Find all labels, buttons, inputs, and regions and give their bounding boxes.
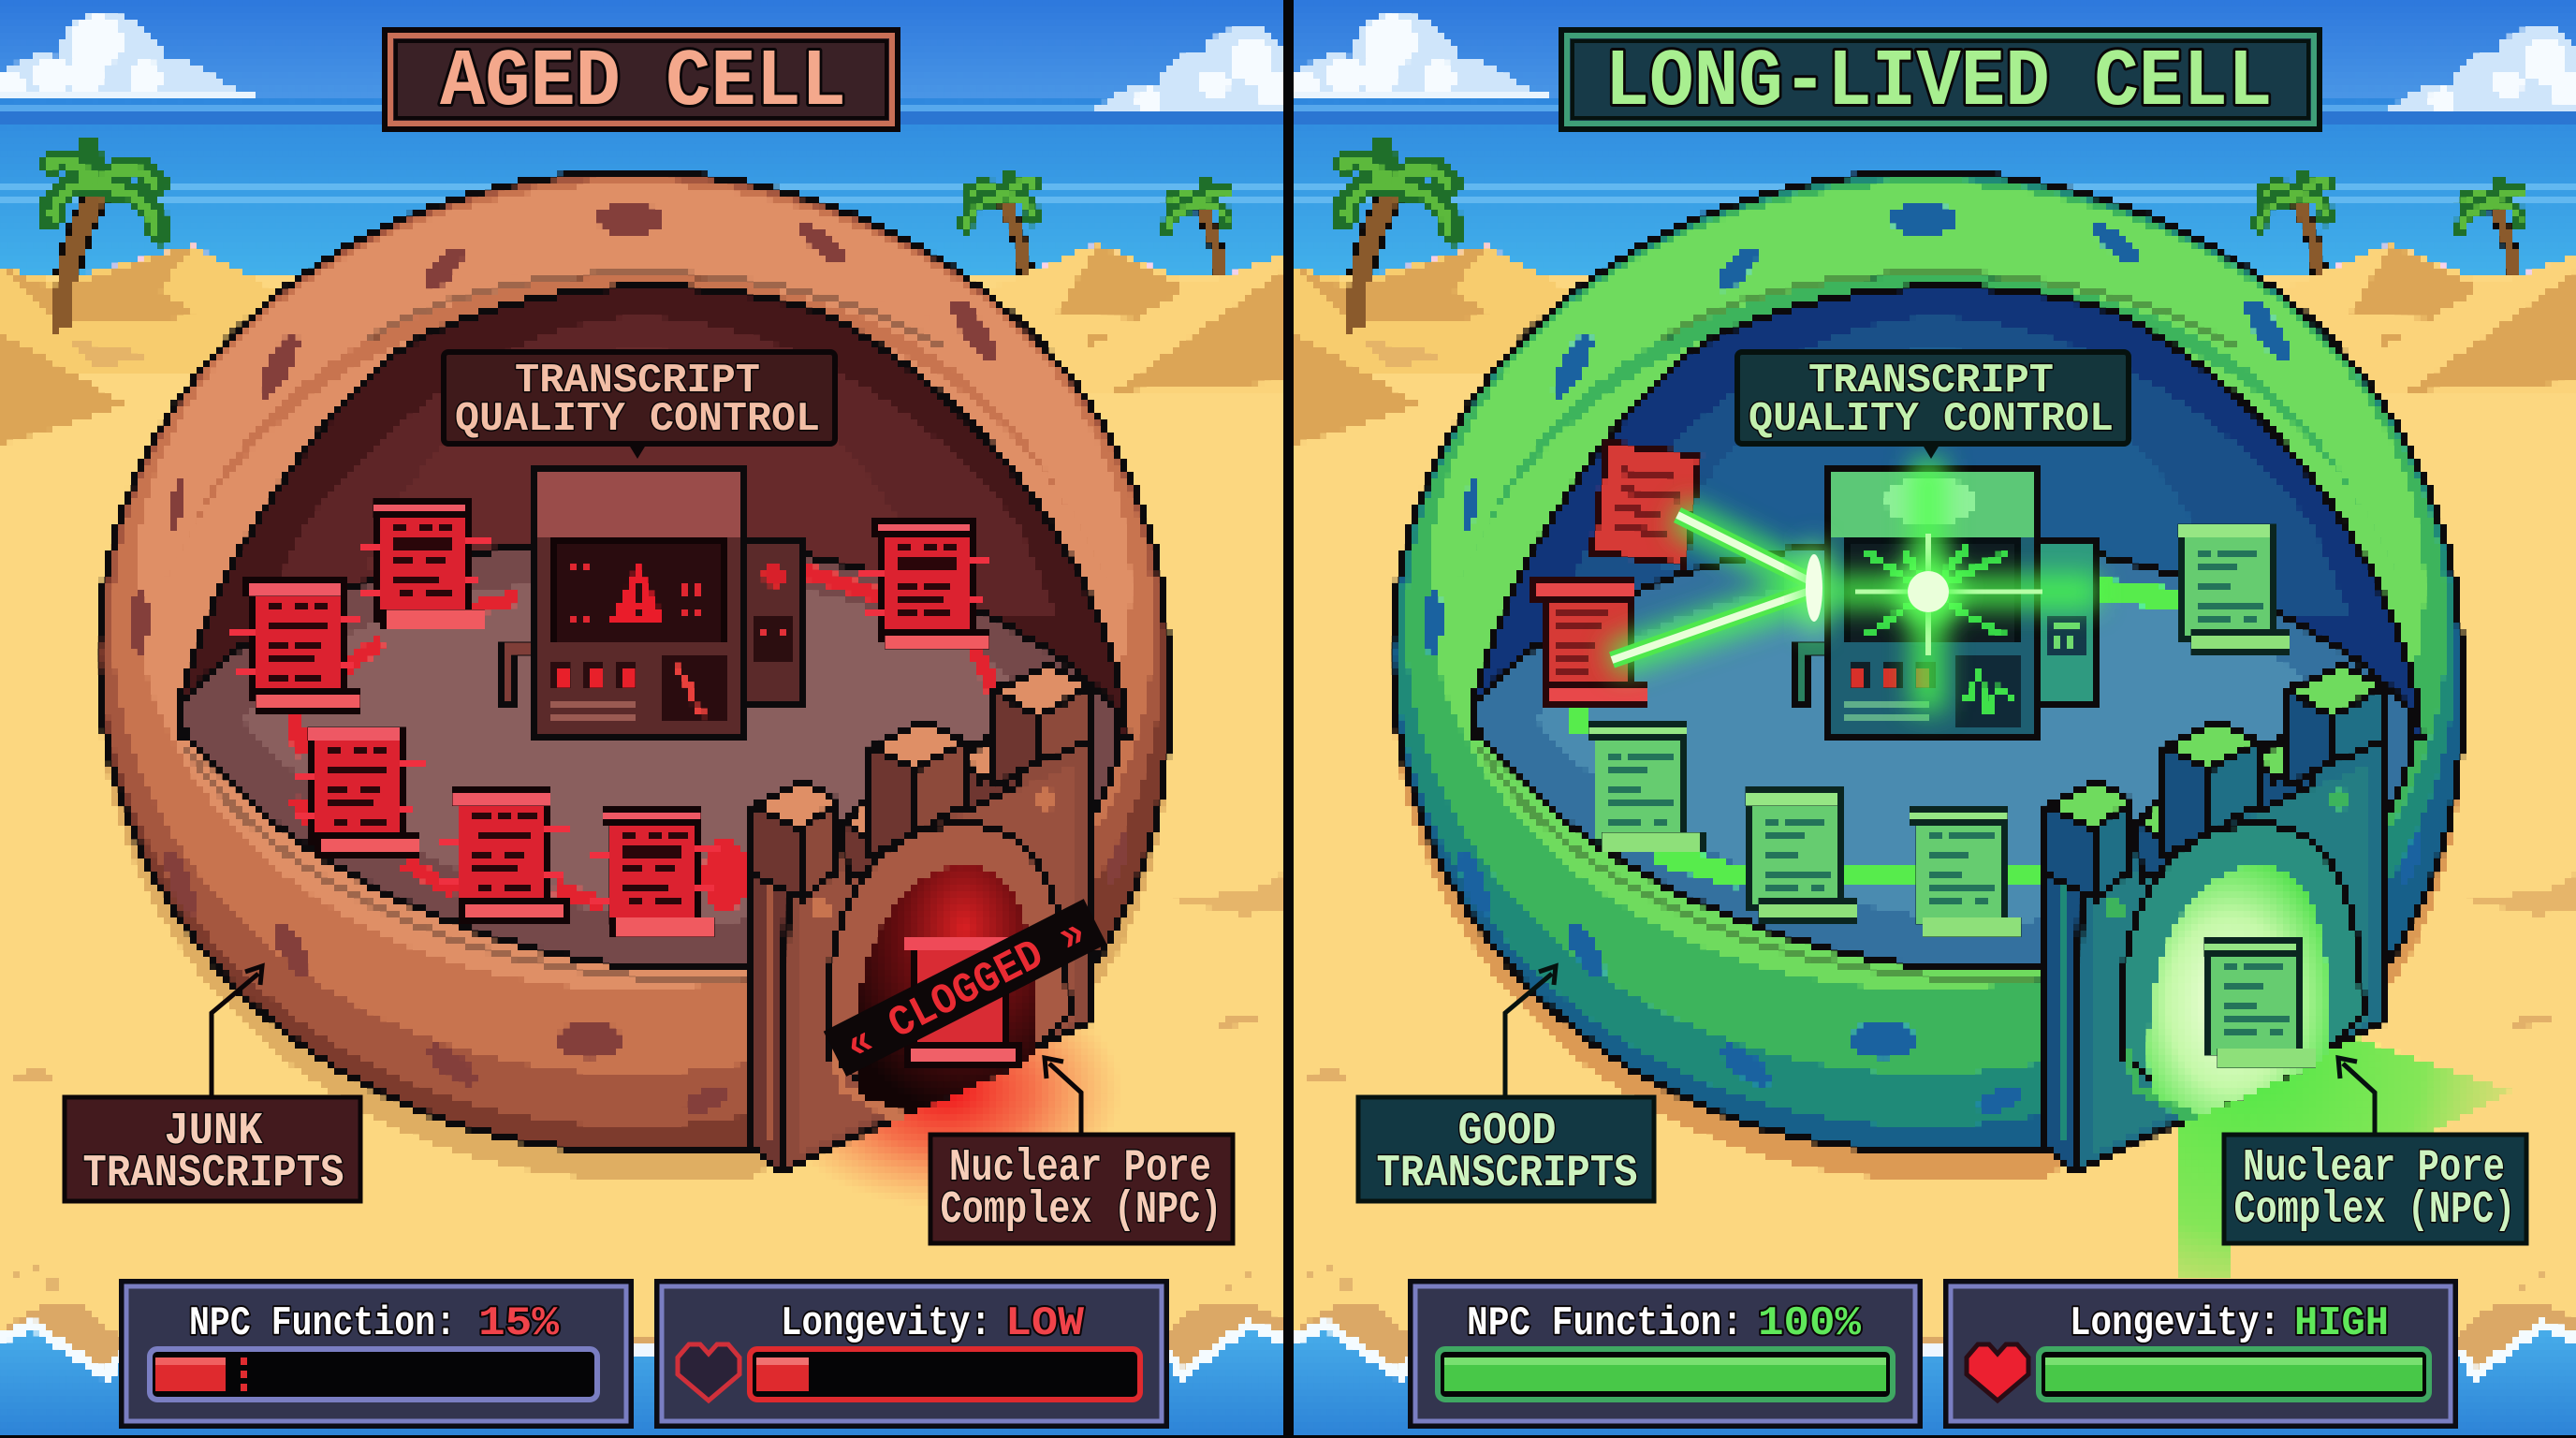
transcript scrolls: good: [1589, 523, 2290, 936]
stat panel: longevity: [657, 1282, 1166, 1426]
nuclear pore gate: [2045, 666, 2386, 1173]
label: transcript quality control: TRANSCRIPT: [515, 358, 760, 404]
title: aged cell: AGED CELL: [440, 37, 846, 128]
clogged banner: « CLOGGED »: [839, 909, 1094, 1071]
label: nuclear pore complex: Nuclear Pore: [2243, 1143, 2505, 1194]
laser beams: [1612, 459, 2099, 712]
label: transcript quality control: [444, 352, 835, 459]
title: long-lived cell: LONG-LIVED CELL: [1604, 37, 2273, 128]
stat panel: longevity: HIGH: [2294, 1300, 2389, 1347]
label: transcript quality control: QUALITY CONTROL: [1749, 396, 2114, 443]
label: nuclear pore complex: [2224, 1135, 2526, 1243]
shell pores: [129, 202, 1133, 1119]
label: junk transcripts: JUNK: [165, 1107, 263, 1157]
nuclear pore gate: [752, 666, 1092, 1173]
label: transcript quality control: QUALITY CONTROL: [455, 396, 820, 443]
label: nuclear pore complex: Complex (NPC): [2233, 1185, 2516, 1236]
stat panel: NPC function: 100%: [1758, 1300, 1862, 1347]
transcript scrolls: junk: [232, 501, 992, 936]
stat panel: NPC function: NPC Function:: [189, 1300, 456, 1347]
stat panel: longevity: Longevity:: [781, 1300, 991, 1347]
exported scroll: [2203, 939, 2316, 1067]
stat panel: NPC function: NPC Function:: [1467, 1300, 1743, 1347]
clogged pore opening: [855, 866, 1037, 1114]
nucleus interior: [178, 286, 1128, 969]
nucleus interior: [1471, 286, 2422, 969]
stat panel: longevity: LOW: [1005, 1300, 1085, 1347]
label: junk transcripts: [65, 1097, 360, 1201]
nucleus shell: [98, 172, 1169, 1180]
red leak blob: [703, 838, 748, 913]
green transport trails: [1574, 580, 2174, 875]
shell pores: [1423, 202, 2426, 1119]
quality control machine: [1794, 471, 2099, 738]
stat panel: longevity: Longevity:: [2070, 1300, 2280, 1347]
rejected junk scrolls: [1535, 443, 1700, 704]
arrow: nuclear pore pointer: [2338, 1058, 2375, 1135]
beach background: [1292, 0, 2576, 1438]
stat panel: longevity: [1946, 1282, 2455, 1426]
label: transcript quality control: TRANSCRIPT: [1808, 358, 2054, 404]
icon: empty heart: [678, 1344, 739, 1401]
stat panel: NPC function: [122, 1282, 631, 1426]
label: nuclear pore complex: Complex (NPC): [940, 1185, 1222, 1236]
arrow: good transcripts pointer: [1505, 966, 1556, 1097]
label: nuclear pore complex: Nuclear Pore: [949, 1143, 1211, 1194]
arrow: nuclear pore pointer: [1045, 1058, 1081, 1135]
quality control machine: [501, 471, 805, 738]
arrow: junk transcripts pointer: [212, 966, 262, 1097]
label: nuclear pore complex: [930, 1135, 1233, 1243]
red glow under pore: [768, 974, 1123, 1208]
beach background: [0, 0, 1294, 1438]
green beam from pore: [2177, 1030, 2510, 1278]
scene: beach illustration and long-lived nucleus: [1292, 0, 2576, 1438]
label: transcript quality control: [1737, 352, 2129, 459]
stat panel: NPC function: 15%: [478, 1300, 560, 1347]
panel: aged cell: [0, 0, 1294, 1438]
stat panel: NPC function: [1411, 1282, 1920, 1426]
panel: long-lived cell: [1292, 0, 2576, 1438]
nucleus shell: [1392, 172, 2463, 1180]
clogged scroll: [903, 937, 1018, 1067]
label: junk transcripts: TRANSCRIPTS: [82, 1149, 344, 1199]
label: good transcripts: [1358, 1097, 1654, 1201]
label: good transcripts: TRANSCRIPTS: [1376, 1149, 1638, 1199]
red damage trails: [295, 571, 1011, 903]
scene: beach illustration and aged nucleus: [0, 0, 1294, 1438]
icon: full heart: [1967, 1344, 2028, 1401]
label: good transcripts: GOOD: [1458, 1107, 1556, 1157]
glowing pore opening: [2148, 866, 2331, 1114]
